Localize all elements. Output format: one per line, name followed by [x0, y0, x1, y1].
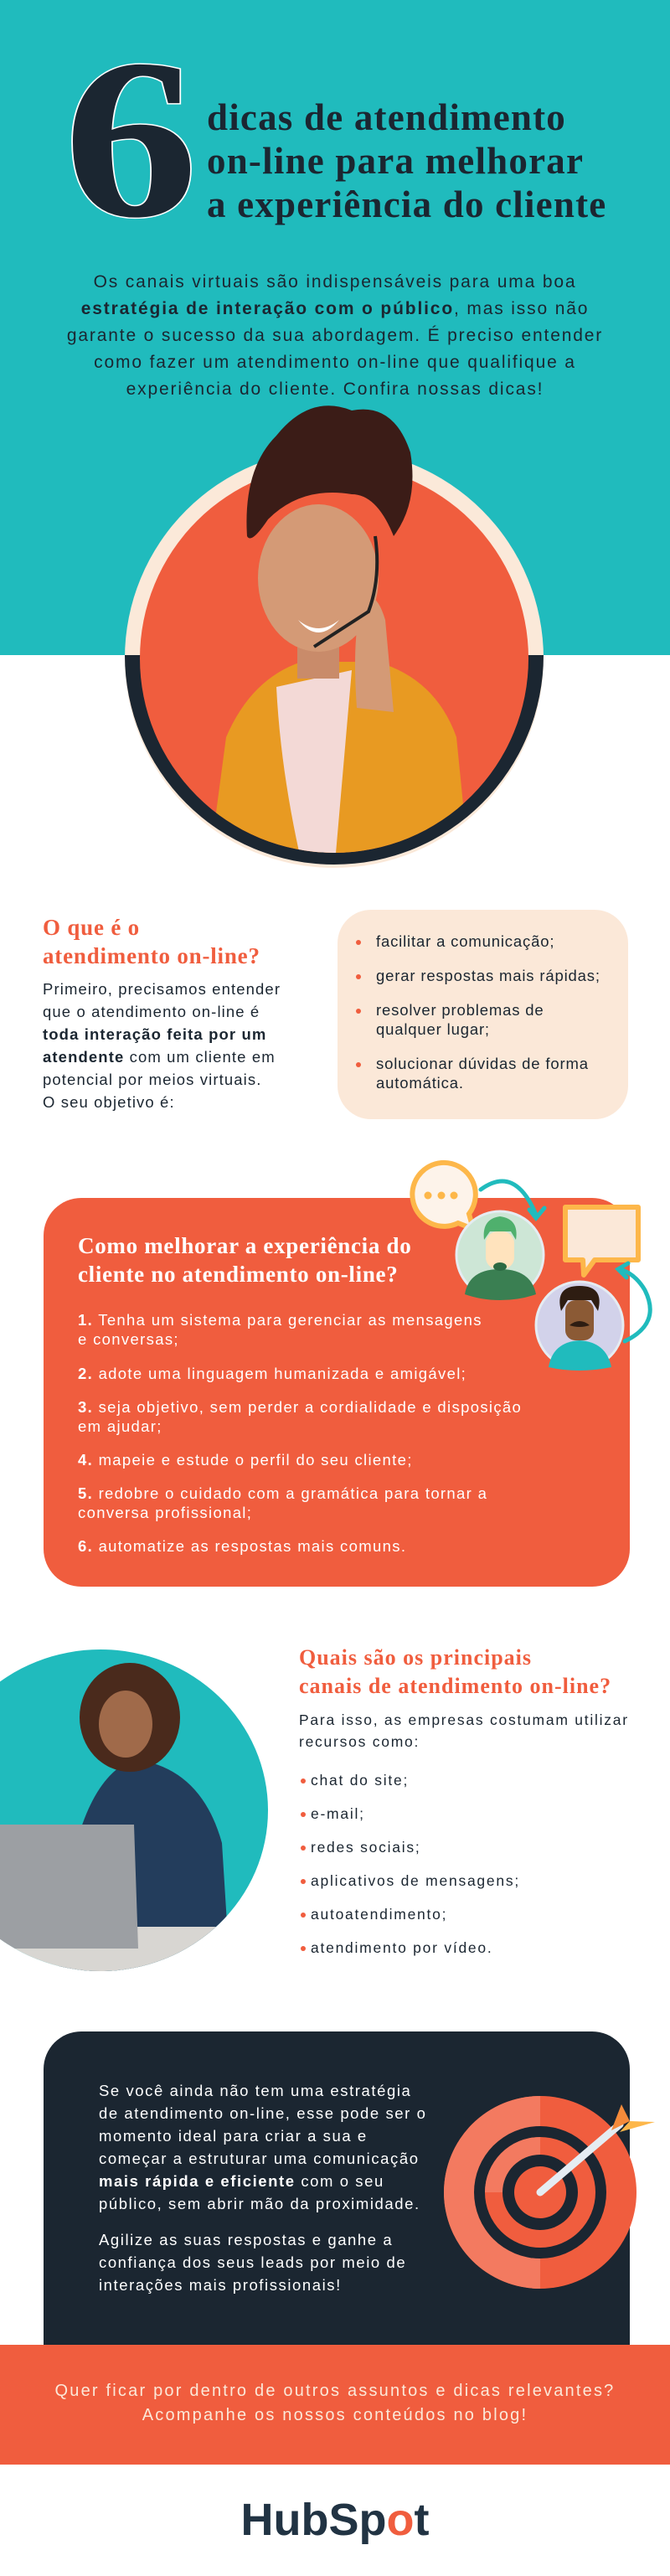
- footer banner: Quer ficar por dentro de outros assuntos e dicas relevantes?: [55, 2382, 615, 2400]
- text: começar a estruturar uma comunicação: [99, 2150, 420, 2167]
- intro paragraph: Os canais virtuais são indispensáveis para uma boa: [94, 272, 576, 292]
- list: [301, 1772, 520, 1956]
- section: principais canais: [299, 1645, 629, 1956]
- icon: speech bubble dots: [412, 1163, 476, 1229]
- numbered list: em ajudar;: [78, 1417, 162, 1435]
- numbered list: conversa profissional;: [78, 1504, 252, 1521]
- panel: dark call to action: [44, 2031, 630, 2350]
- title: [64, 13, 606, 265]
- hero photo: woman with headset: [125, 405, 544, 868]
- icon: man avatar: [536, 1282, 623, 1371]
- numbered list: e conversas;: [78, 1330, 179, 1348]
- footer banner: Acompanhe os nossos conteúdos no blog!: [142, 2406, 528, 2424]
- numbered list: 1. Tenha um sistema para gerenciar as mensagens: [78, 1311, 482, 1329]
- text: atendente com um cliente em: [43, 1048, 276, 1066]
- panel: objectives list: facilitar a comunicação;: [376, 932, 554, 950]
- footer banner: [0, 2345, 670, 2465]
- heading: cliente no atendimento on-line?: [78, 1262, 398, 1287]
- numbered list: 5. redobre o cuidado com a gramática para tornar a: [78, 1484, 487, 1502]
- list: e-mail;: [311, 1805, 365, 1822]
- panel: objectives list: resolver problemas de: [376, 1001, 544, 1019]
- photo: woman at laptop: [0, 1649, 268, 1971]
- numbered list: [78, 1311, 522, 1555]
- teal header background: [0, 0, 670, 655]
- heading: Quais são os principais: [299, 1645, 532, 1670]
- title text: on-line para melhorar: [207, 140, 584, 182]
- heading: [78, 1233, 411, 1287]
- icon: target with arrow: [444, 2096, 655, 2289]
- big number 6: 6: [64, 13, 198, 265]
- icon: green avatar: [456, 1211, 544, 1300]
- panel: dark call to action: confiança dos seus leads por meio de: [99, 2253, 406, 2271]
- panel: como melhorar: [44, 1198, 630, 1587]
- text: [299, 1711, 629, 1750]
- list: atendimento por vídeo.: [311, 1939, 493, 1956]
- panel: dark call to action: interações mais profissionais!: [99, 2276, 342, 2294]
- text: mais rápida e eficiente com o seu: [99, 2172, 384, 2190]
- intro paragraph: como fazer um atendimento on-line que qualifique a: [94, 353, 576, 372]
- text: Se você ainda não tem uma estratégia: [99, 2082, 411, 2099]
- title text: a experiência do cliente: [207, 183, 606, 225]
- arrow 2: [618, 1263, 650, 1341]
- panel: objectives list: [338, 910, 628, 1119]
- text: [99, 2082, 426, 2212]
- text: público, sem abrir mão da proximidade.: [99, 2195, 420, 2212]
- text: Primeiro, precisamos entender: [43, 980, 281, 998]
- title text: [207, 96, 606, 225]
- panel: objectives list: gerar respostas mais rápidas;: [376, 967, 600, 984]
- list: aplicativos de mensagens;: [311, 1872, 520, 1889]
- icons: chat avatars: [410, 1159, 652, 1371]
- text: que o atendimento on-line é: [43, 1003, 260, 1020]
- numbered list: 4. mapeie e estude o perfil do seu cliente;: [78, 1451, 413, 1469]
- section: O que é o atendimento on-line: [43, 915, 281, 1111]
- intro paragraph: estratégia de interação com o público, mas isso não: [81, 299, 589, 318]
- icon: square bubble: [565, 1207, 638, 1275]
- text: [43, 980, 281, 1111]
- heading: [299, 1645, 611, 1698]
- text: Para isso, as empresas costumam utilizar: [299, 1711, 629, 1728]
- panel: objectives list: qualquer lugar;: [376, 1020, 490, 1038]
- text: O seu objetivo é:: [43, 1093, 175, 1111]
- logo: HubSpot: HubSpot: [241, 2495, 429, 2545]
- list: autoatendimento;: [311, 1906, 447, 1923]
- intro paragraph: [67, 272, 603, 399]
- panel: dark call to action: Agilize as suas respostas e ganhe a: [99, 2231, 393, 2248]
- heading: atendimento on-line?: [43, 943, 260, 968]
- text: toda interação feita por um: [43, 1025, 266, 1043]
- intro paragraph: experiência do cliente. Confira nossas dicas!: [126, 379, 544, 399]
- list: redes sociais;: [311, 1839, 420, 1856]
- text: momento ideal para criar a sua e: [99, 2127, 368, 2145]
- text: potencial por meios virtuais.: [43, 1071, 261, 1088]
- title text: dicas de atendimento: [207, 96, 566, 138]
- heading: O que é o: [43, 915, 140, 940]
- panel: objectives list: automática.: [376, 1074, 464, 1092]
- panel: objectives list: solucionar dúvidas de forma: [376, 1055, 589, 1072]
- list: chat do site;: [311, 1772, 409, 1789]
- intro paragraph: garante o sucesso da sua abordagem. É preciso entender: [67, 326, 603, 345]
- numbered list: 6. automatize as respostas mais comuns.: [78, 1537, 406, 1555]
- numbered list: 2. adote uma linguagem humanizada e amigável;: [78, 1365, 466, 1382]
- numbered list: 3. seja objetivo, sem perder a cordialidade e disposição: [78, 1398, 522, 1416]
- arrow 1: [481, 1181, 544, 1218]
- heading: Como melhorar a experiência do: [78, 1233, 411, 1258]
- heading: canais de atendimento on-line?: [299, 1674, 611, 1698]
- heading: [43, 915, 260, 968]
- text: recursos como:: [299, 1733, 420, 1750]
- text: de atendimento on-line, esse pode ser o: [99, 2104, 426, 2122]
